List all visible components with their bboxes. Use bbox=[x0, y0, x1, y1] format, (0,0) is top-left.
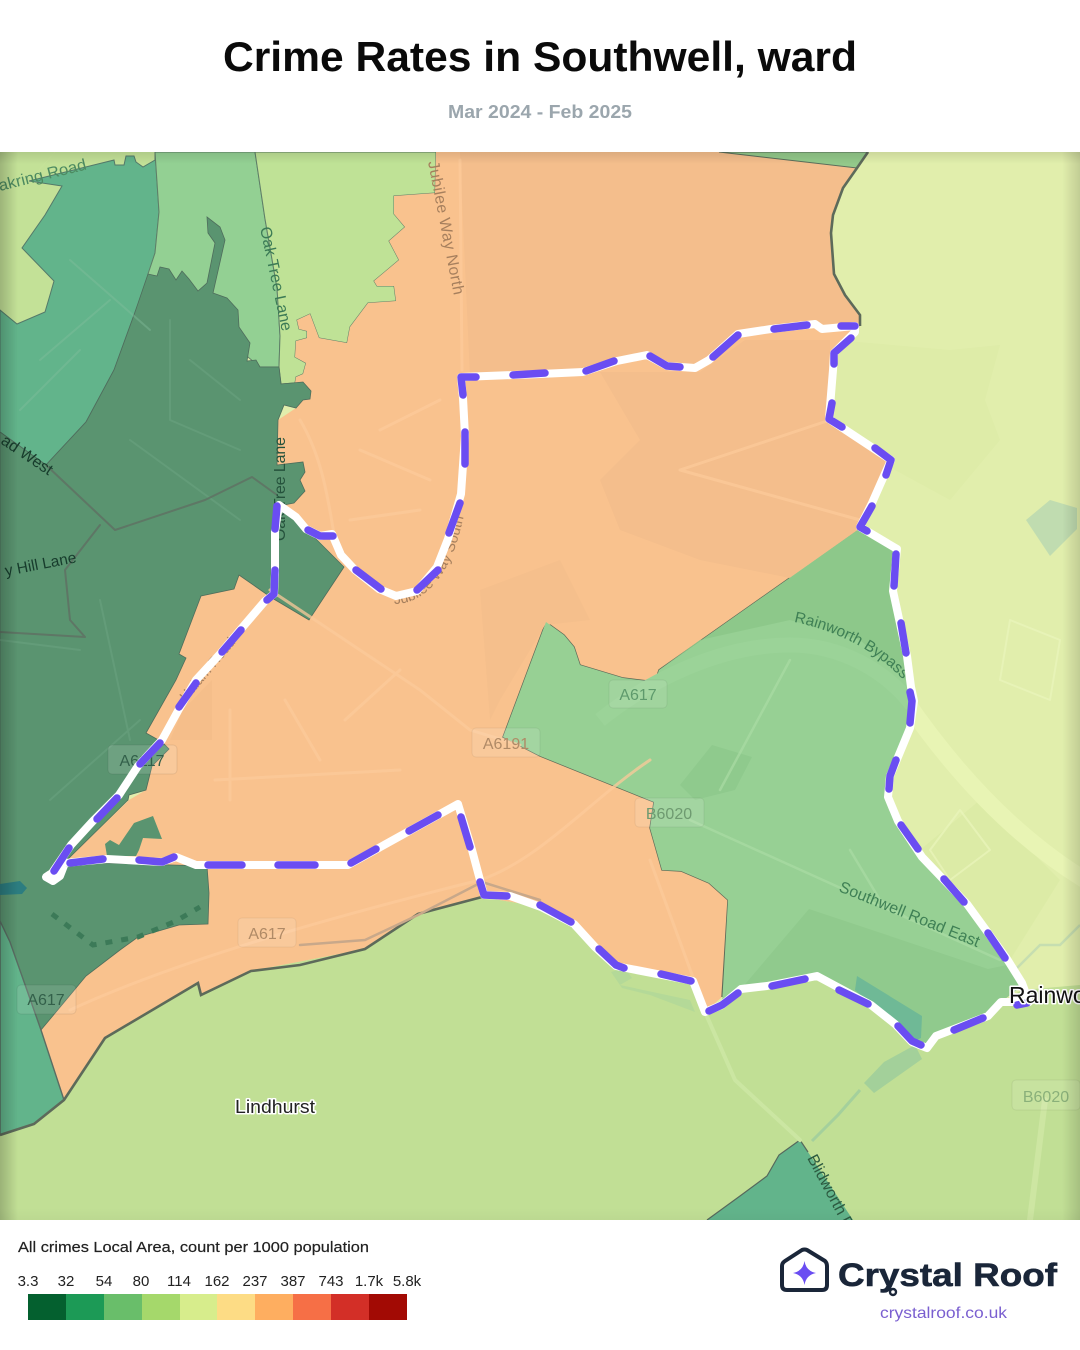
local road network bbox=[0, 160, 1060, 1220]
legend scale labels: 3.3 bbox=[18, 1273, 38, 1290]
legend scale labels: 80 bbox=[133, 1273, 149, 1290]
subtitle: date range: Mar 2024 - Feb 2025 bbox=[448, 102, 632, 122]
title: Crime Rates in Southwell, ward bbox=[223, 33, 857, 80]
road shields: A6117 bbox=[119, 753, 165, 770]
road name labels bbox=[0, 158, 980, 1296]
road name labels: Blidworth Road bbox=[803, 1152, 869, 1256]
road name labels: y Hill Lane bbox=[4, 549, 78, 580]
legend scale labels: 54 bbox=[96, 1273, 112, 1290]
area: darker green patches bbox=[644, 530, 1016, 1040]
legend scale labels: 114 bbox=[167, 1273, 191, 1290]
road name labels: Rainworth Bypass bbox=[795, 612, 905, 678]
area: light green north bbox=[255, 152, 436, 384]
road shields bbox=[17, 680, 1080, 1110]
legend bbox=[18, 1239, 422, 1320]
map edge vignette bbox=[0, 152, 1080, 1220]
area: green south pocket bbox=[707, 1140, 853, 1220]
legend scale labels: 387 bbox=[280, 1273, 306, 1290]
ward boundary: white casing and purple dashes bbox=[46, 324, 1029, 1048]
road shields: B6020 bbox=[1023, 1089, 1069, 1106]
road shields: A617 bbox=[619, 687, 657, 704]
area: green south-east ward bbox=[503, 530, 1016, 1000]
legend title: All crimes Local Area, count per 1000 population bbox=[18, 1239, 369, 1256]
orange outline bbox=[502, 530, 858, 997]
area: pale north-west corner bbox=[0, 152, 62, 324]
pond and stream south-east bbox=[611, 968, 922, 1141]
area: medium green north-west bbox=[0, 152, 159, 465]
icon: house with star bbox=[782, 1250, 827, 1290]
area: Lindhurst lower band bbox=[0, 897, 1080, 1220]
legend scale labels: 32 bbox=[58, 1273, 74, 1290]
website link: crystalroof.co.uk bbox=[880, 1305, 1008, 1322]
road name labels: Halam Road bbox=[176, 634, 238, 704]
legend scale labels: 237 bbox=[242, 1273, 268, 1290]
road name labels: Oak Tree Lane bbox=[272, 437, 289, 541]
area: dark green island bbox=[105, 816, 162, 856]
area: medium green south-west bbox=[0, 921, 64, 1135]
area: orange high-rate main zone bbox=[41, 152, 891, 1100]
area: green sliver north edge bbox=[719, 152, 868, 168]
wordmark: Crystal Roof bbox=[838, 1257, 1057, 1293]
legend scale labels: 5.8k bbox=[393, 1273, 422, 1290]
place labels with halo bbox=[235, 982, 1080, 1117]
logo: Crystal Roof bbox=[782, 1250, 1057, 1322]
area: darker orange fields bbox=[542, 530, 858, 630]
road name labels: Southwell Road East bbox=[837, 879, 982, 951]
water: lake at left bbox=[0, 881, 27, 895]
road shields: A6191 bbox=[483, 736, 529, 753]
road shields: A617 bbox=[248, 926, 286, 943]
legend scale labels: 162 bbox=[204, 1273, 230, 1290]
road name labels: Jubilee Way North bbox=[424, 160, 467, 296]
road shields: B6020 bbox=[646, 806, 692, 823]
road name labels: Jubilee Way South bbox=[394, 516, 464, 604]
legend scale labels: 1.7k bbox=[355, 1273, 384, 1290]
legend colour swatches bbox=[28, 1294, 407, 1320]
boundary: dark thick southern edge bbox=[0, 152, 868, 1135]
legend scale labels: 743 bbox=[318, 1273, 344, 1290]
road name labels: Oak Tree Lane bbox=[256, 225, 295, 333]
area: dark green low-rate west bbox=[0, 217, 344, 1030]
place labels with halo: Lindhurst bbox=[235, 1097, 315, 1117]
road shields: A617 bbox=[27, 992, 65, 1009]
area: soft green strip bbox=[148, 152, 280, 367]
icon: y tail dot bbox=[890, 1289, 896, 1295]
area: pale eastern fields bbox=[1016, 500, 1080, 969]
railway: dashed line bbox=[52, 907, 200, 945]
legend scale labels bbox=[18, 1273, 422, 1290]
